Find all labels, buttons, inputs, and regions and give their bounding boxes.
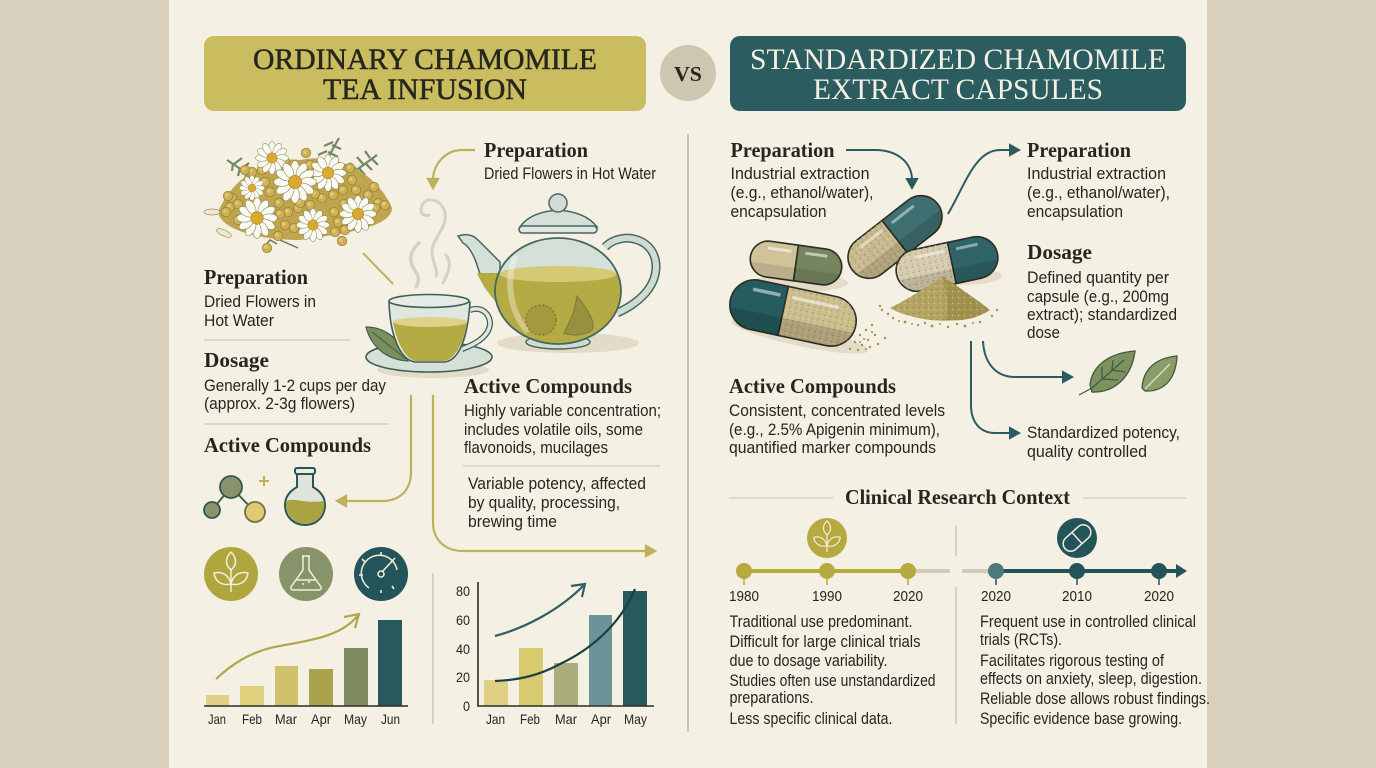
text: active compounds, capsules: Consistent, concentrated levels xyxy=(729,401,945,420)
text: preparation, capsules left: encapsulation xyxy=(730,202,826,221)
capsule: teal and beige, top xyxy=(840,187,950,287)
bar chart: left xyxy=(204,614,408,727)
text: clinical context, capsules: trials (RCTs). xyxy=(980,630,1062,649)
text: dosage, capsules: Dosage xyxy=(1027,240,1092,264)
text: preparation, top: Preparation xyxy=(484,138,588,162)
text: preparation, capsules right: encapsulation xyxy=(1027,202,1123,221)
text: clinical context, capsules: Specific evidence base growing. xyxy=(980,709,1182,728)
text: clinical context, capsules xyxy=(980,612,1210,728)
text: preparation, capsules left: Preparation xyxy=(730,138,835,162)
arrow: flowers to cup xyxy=(363,253,393,284)
header: standardized chamomile extract capsules: STANDARDIZED CHAMOMILE xyxy=(750,43,1166,76)
text: standardized potency: Standardized potency, xyxy=(1027,423,1180,442)
text: dosage, capsules: dose xyxy=(1027,323,1060,342)
icon: leaves xyxy=(1079,351,1177,395)
bar chart: right: May xyxy=(624,711,647,727)
illustration: teapot xyxy=(458,194,656,353)
text: dosage: Dosage xyxy=(204,348,269,372)
text: clinical context, tea: Less specific clinical data. xyxy=(730,709,892,728)
text: clinical context, tea: Traditional use predominant. xyxy=(730,612,912,631)
text: active compounds, centre: flavonoids, mucilages xyxy=(464,438,608,457)
header: ordinary chamomile tea infusion: ORDINARY CHAMOMILE xyxy=(253,43,597,76)
icon: round flask xyxy=(285,468,325,525)
text: active compounds, capsules xyxy=(729,374,945,457)
text: preparation, capsules left: (e.g., ethanol/water), xyxy=(730,183,874,202)
text: active compounds, centre: Highly variable concentration; xyxy=(464,401,661,420)
header: standardized chamomile extract capsules xyxy=(730,36,1186,111)
main panel xyxy=(169,0,1207,768)
header: ordinary chamomile tea infusion: TEA INFUSION xyxy=(323,73,527,106)
text: preparation, capsules right: Industrial extraction xyxy=(1027,164,1166,183)
heading: clinical research context: Clinical Research Context xyxy=(845,485,1070,509)
text: active compounds, centre xyxy=(464,374,661,457)
timeline: ordinary tea: 2020 xyxy=(893,588,923,605)
arrow: to cup from preparation xyxy=(428,150,475,188)
text: active compounds, capsules: quantified marker compounds xyxy=(729,438,936,457)
text: clinical context, tea xyxy=(730,612,936,728)
text: clinical context, capsules: effects on anxiety, sleep, digestion. xyxy=(980,669,1202,688)
vs badge xyxy=(660,45,716,101)
text: preparation, left: Dried Flowers in xyxy=(204,292,316,311)
arrow: capsules to standardized potency xyxy=(971,341,1019,438)
text: clinical context, tea: preparations. xyxy=(730,688,814,707)
text: dosage, capsules: capsule (e.g., 200mg xyxy=(1027,287,1169,306)
text: dosage, capsules: Defined quantity per xyxy=(1027,268,1169,287)
capsule: beige and teal, right xyxy=(892,233,1002,295)
text: standardized potency xyxy=(1027,423,1180,461)
text: preparation, capsules right: (e.g., ethanol/water), xyxy=(1027,183,1170,202)
timeline: ordinary tea: 1990 xyxy=(812,588,842,605)
text: standardized potency: quality controlled xyxy=(1027,442,1147,461)
text: clinical context, capsules: Reliable dose allows robust findings. xyxy=(980,689,1210,708)
text: preparation, capsules right: Preparation xyxy=(1027,138,1131,162)
timeline: capsules: 2010 xyxy=(1062,588,1092,605)
text: variable potency: Variable potency, affected xyxy=(468,474,646,493)
icon: plant badge xyxy=(807,518,847,558)
text: variable potency: brewing time xyxy=(468,512,557,531)
heading: active compounds, left: Active Compounds xyxy=(204,433,371,457)
timeline: ordinary tea: 1980 xyxy=(729,588,759,605)
icon: flask circle xyxy=(279,547,333,601)
arrow: cup to potency chart xyxy=(433,395,655,556)
text: preparation, capsules left: Industrial extraction xyxy=(730,164,870,183)
illustration: tea cup and saucer xyxy=(366,294,492,378)
text: preparation, top xyxy=(484,138,656,183)
bar chart: left: Feb xyxy=(242,711,262,727)
text: variable potency xyxy=(468,474,646,531)
illustration: dried chamomile flowers xyxy=(204,138,392,253)
bar chart: left: May xyxy=(344,711,367,727)
text: clinical context, capsules: Facilitates rigorous testing of xyxy=(980,651,1164,670)
capsule: beige and green xyxy=(748,239,844,287)
text: dosage xyxy=(204,348,386,413)
text: clinical context, capsules: Frequent use in controlled clinical xyxy=(980,612,1196,631)
text: variable potency: by quality, processing, xyxy=(468,493,620,512)
timeline: capsules: 2020 xyxy=(1144,588,1174,605)
text: preparation, capsules left xyxy=(730,138,874,221)
bar chart: right: Apr xyxy=(591,711,611,727)
bar chart: left: Mar xyxy=(275,711,297,727)
text: preparation, top: Dried Flowers in Hot Water xyxy=(484,164,656,183)
bar chart: right: 60 xyxy=(456,612,470,628)
text: preparation, capsules right xyxy=(1027,138,1170,221)
bar chart: left: Jan xyxy=(208,711,226,727)
bar chart: left: Apr xyxy=(311,711,331,727)
icon: plant circle xyxy=(204,547,258,601)
text: clinical context, tea: Difficult for large clinical trials xyxy=(730,632,920,651)
bar chart: right: 40 xyxy=(456,641,470,657)
header: standardized chamomile extract capsules: EXTRACT CAPSULES xyxy=(813,73,1103,106)
arrow: capsules to preparation xyxy=(948,145,1019,214)
arrow: cup to active compounds icons xyxy=(337,395,411,506)
header: ordinary chamomile tea infusion xyxy=(204,36,646,111)
arrow: capsules to leaves xyxy=(983,341,1072,382)
bar chart: right: Feb xyxy=(520,711,540,727)
text: active compounds, centre: includes volatile oils, some xyxy=(464,420,643,439)
text: active compounds, centre: Active Compounds xyxy=(464,374,632,398)
bar chart: right: Jan xyxy=(486,711,505,727)
text: active compounds, capsules: Active Compounds xyxy=(729,374,896,398)
text: dosage: (approx. 2-3g flowers) xyxy=(204,394,355,413)
centre divider xyxy=(687,134,689,732)
timeline: capsules xyxy=(962,563,1187,605)
illustration: capsules and powder xyxy=(725,187,1002,360)
text: active compounds, capsules: (e.g., 2.5% Apigenin minimum), xyxy=(729,420,940,439)
vs badge: VS xyxy=(674,62,702,86)
text: dosage: Generally 1-2 cups per day xyxy=(204,376,386,395)
text: preparation, left: Preparation xyxy=(204,265,308,289)
text: dosage, capsules xyxy=(1027,240,1177,342)
text: clinical context, tea: due to dosage variability. xyxy=(730,651,888,670)
icon: gauge circle xyxy=(354,547,408,601)
text: dosage, capsules: extract); standardized xyxy=(1027,305,1177,324)
bar chart: right: 80 xyxy=(456,583,470,599)
bar chart: right: 0 xyxy=(463,698,470,714)
text: preparation, left: Hot Water xyxy=(204,311,274,330)
arrow: preparation to capsules xyxy=(846,150,917,188)
text: preparation, left xyxy=(204,265,316,330)
timeline: capsules: 2020 xyxy=(981,588,1011,605)
bar chart: right: Mar xyxy=(555,711,577,727)
powder pile xyxy=(890,276,990,321)
bar chart: right xyxy=(456,582,654,727)
timeline: ordinary tea xyxy=(729,563,950,605)
capsule: teal and beige, large xyxy=(725,275,861,351)
bar chart: left: Jun xyxy=(381,711,400,727)
icon: molecule xyxy=(204,476,269,522)
bar chart: right: 20 xyxy=(456,669,470,685)
icon: capsule badge xyxy=(1057,518,1097,558)
text: clinical context, tea: Studies often use unstandardized xyxy=(730,671,936,690)
icon: steam xyxy=(411,200,449,287)
